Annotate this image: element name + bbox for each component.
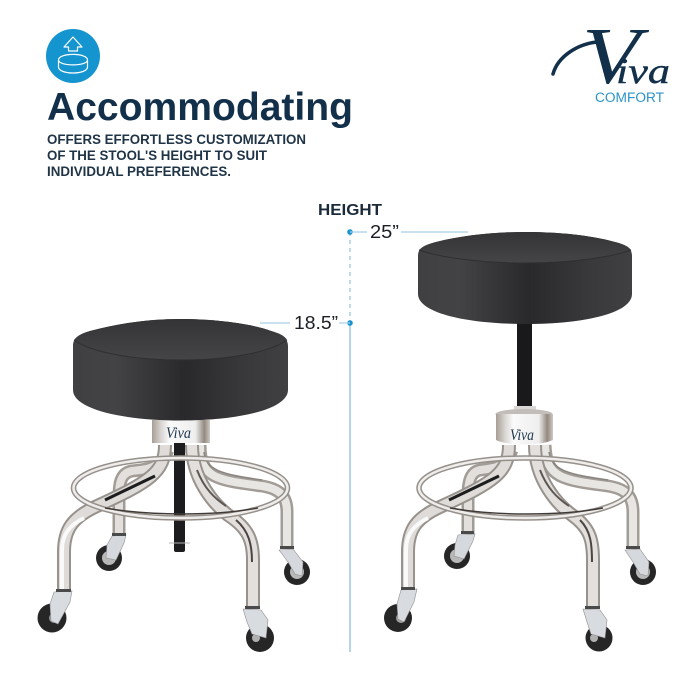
caster: front left: [38, 589, 72, 632]
caster: back right: [625, 546, 656, 585]
front legs: [406, 445, 593, 607]
foot ring: [419, 458, 631, 518]
caster: front left: [384, 587, 417, 632]
description text: [47, 132, 306, 179]
measurement: 25 inches: 25”: [370, 221, 399, 242]
brand logo: [553, 13, 670, 105]
caster: front right: [583, 606, 612, 652]
brand logo: COMFORT: [595, 90, 664, 105]
collar with logo: [496, 406, 553, 444]
seat cushion: [73, 319, 288, 420]
measurement: 25 inches: [347, 221, 468, 242]
brand logo: V: [582, 13, 650, 101]
caster: back left: [444, 531, 475, 569]
collar with logo: Viva: [510, 427, 534, 444]
collar with logo: Viva: [166, 425, 191, 442]
seat cushion: [418, 232, 632, 324]
foot ring: [74, 458, 288, 518]
description text: INDIVIDUAL PREFERENCES.: [47, 164, 231, 179]
back legs: [468, 445, 633, 548]
description text: OFFERS EFFORTLESS CUSTOMIZATION: [47, 132, 306, 147]
caster: back right: [279, 546, 310, 585]
description text: OF THE STOOL'S HEIGHT TO SUIT: [47, 148, 268, 163]
measurement: 18.5 inches: [260, 312, 353, 333]
measurement: 18.5 inches: 18.5”: [294, 312, 338, 333]
back legs: [119, 445, 287, 547]
dimension label: HEIGHT: HEIGHT: [318, 202, 382, 219]
stool: raised position: [384, 232, 656, 652]
caster: back left: [96, 533, 126, 571]
front legs: [62, 445, 253, 607]
title: Accommodating: [47, 86, 353, 129]
icon: seat height up arrow: [46, 29, 100, 83]
caster: front right: [243, 606, 274, 652]
dimension axis: [349, 232, 351, 652]
height dimension diagram: [260, 202, 468, 652]
threaded screw: [517, 322, 532, 414]
brand logo: iva: [616, 51, 670, 91]
threaded screw: [169, 440, 190, 552]
stool: lowered position: [38, 319, 310, 652]
collar with logo: [152, 420, 210, 443]
